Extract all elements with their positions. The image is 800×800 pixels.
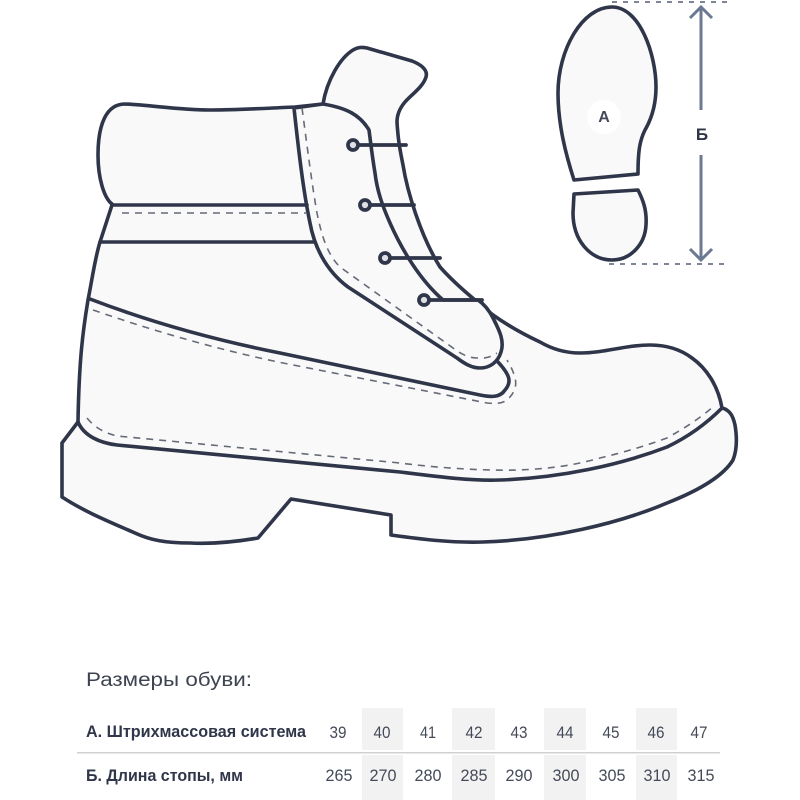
- boot welt line: [78, 408, 722, 480]
- laces and eyelets: [348, 140, 482, 305]
- dimension dashes: [609, 2, 728, 264]
- row B: foot length: [86, 766, 714, 785]
- boot heel back line: [78, 205, 112, 422]
- label Б: Б: [696, 125, 708, 144]
- boot toe line: [493, 315, 722, 408]
- boot tongue: [323, 47, 493, 315]
- arrow: length down: [690, 155, 712, 260]
- row B: foot length: 285: [460, 766, 488, 785]
- row A: sizes: 43: [510, 723, 528, 742]
- row A: sizes: [86, 722, 708, 742]
- label A: А: [598, 109, 610, 126]
- stitching lines: [87, 108, 713, 470]
- size table: [77, 708, 720, 800]
- boot silhouette fill: [62, 47, 736, 543]
- row B: foot length: 265: [326, 766, 352, 785]
- cuff seam lines: [100, 205, 315, 242]
- row A: sizes: 41: [420, 723, 436, 742]
- row B: foot length: 300: [552, 766, 580, 785]
- icon: sole heel: [573, 190, 646, 260]
- row B: foot length: Б. Длина стопы, мм: [86, 766, 243, 785]
- row A: sizes: 47: [690, 723, 708, 742]
- row A: sizes: 39: [330, 723, 346, 742]
- row B: foot length: 305: [598, 766, 626, 785]
- row B: foot length: 280: [414, 766, 442, 785]
- boot lacing flap: [294, 104, 502, 368]
- row divider: [77, 752, 720, 754]
- boot sole: [62, 408, 736, 543]
- boot illustration: [62, 47, 736, 543]
- row B: foot length: 290: [506, 766, 532, 785]
- row B: foot length: 315: [688, 766, 714, 785]
- row A: sizes: А. Штрихмассовая система: [86, 722, 307, 741]
- sole diagram: [558, 2, 728, 264]
- column shading: [362, 708, 677, 800]
- table heading: Размеры обуви:: [86, 670, 252, 691]
- arrow: length up: [690, 7, 712, 110]
- row B: foot length: 270: [370, 766, 396, 785]
- boot cuff: [98, 104, 323, 204]
- row A: sizes: 42: [466, 723, 482, 742]
- row A: sizes: 46: [648, 723, 664, 742]
- row A: sizes: 44: [556, 723, 574, 742]
- row A: sizes: 40: [374, 723, 390, 742]
- boot vamp line: [90, 299, 509, 396]
- label A: [587, 100, 621, 134]
- row A: sizes: 45: [602, 723, 620, 742]
- icon: sole front: [558, 7, 656, 180]
- row B: foot length: 310: [644, 766, 670, 785]
